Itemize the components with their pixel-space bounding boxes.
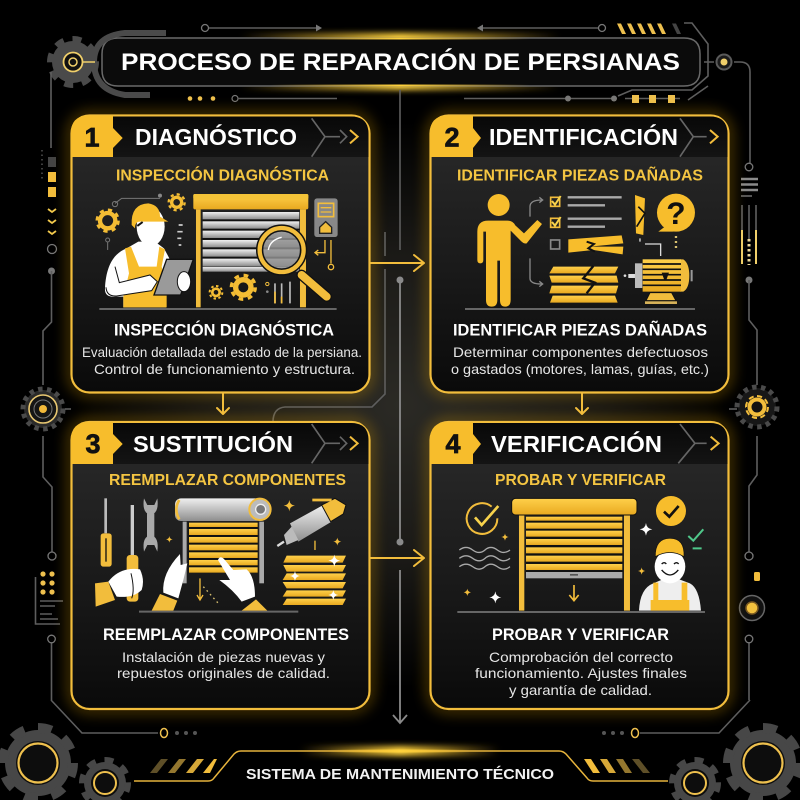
description: repuestos originales de calidad.	[117, 665, 330, 681]
heading: VERIFICACIÓN	[491, 430, 662, 457]
description	[451, 344, 709, 377]
illustration: replacing components	[95, 498, 346, 612]
badge number 3	[71, 422, 123, 464]
arrow: step 2 to step 4	[576, 393, 588, 414]
description: Instalación de piezas nuevas y	[122, 649, 325, 665]
caulking gun	[290, 505, 332, 542]
illustration: testing shutter and happy technician	[457, 496, 705, 612]
waves	[459, 547, 510, 569]
badge number 2: 2	[444, 123, 460, 153]
badge number 2	[430, 116, 481, 157]
description: Comprobación del correcto	[489, 649, 673, 665]
badge number 4: 4	[445, 429, 461, 459]
panel glows	[72, 116, 728, 709]
technician	[639, 578, 701, 611]
heading: SUSTITUCIÓN	[133, 430, 293, 457]
icon: gears bottom left	[3, 728, 128, 800]
illustration: person identifying damaged parts	[465, 194, 695, 309]
heading: IDENTIFICACIÓN	[489, 123, 678, 150]
illustration: person identifying damaged parts: ?	[666, 195, 686, 231]
title banner	[102, 33, 700, 90]
header chevrons	[680, 118, 718, 157]
badge number 4	[430, 422, 481, 464]
worker body	[105, 242, 169, 307]
subtitle: REEMPLAZAR COMPONENTES	[109, 472, 346, 489]
magnifier	[302, 275, 327, 297]
tools	[102, 498, 110, 533]
icon: header gear left	[50, 33, 166, 95]
roller	[183, 522, 187, 583]
description	[82, 344, 362, 377]
description: o gastados (motores, lamas, guías, etc.)	[451, 361, 709, 377]
decorative circuit: left column	[23, 150, 71, 700]
badge number 1	[71, 116, 123, 157]
check circle	[467, 503, 497, 534]
header chevrons	[312, 118, 358, 157]
subtitle: PROBAR Y VERIFICAR	[495, 472, 666, 489]
sparkles	[489, 523, 652, 603]
footer banner	[134, 746, 668, 783]
description: y garantía de calidad.	[509, 682, 652, 698]
footer text: SISTEMA DE MANTENIMIENTO TÉCNICO	[246, 766, 554, 783]
illustration: worker inspecting shutter	[97, 194, 338, 309]
panel 4: verificación	[430, 422, 728, 709]
description: Determinar componentes defectuosos	[453, 344, 708, 360]
description: Control de funcionamiento y estructura.	[94, 361, 355, 377]
description: Evaluación detallada del estado de la persiana.	[82, 344, 362, 360]
icon: gears bottom right	[672, 728, 798, 800]
subtitle: IDENTIFICAR PIEZAS DAÑADAS	[457, 164, 703, 184]
shutter	[196, 209, 201, 307]
decorative circuit: top	[51, 23, 750, 163]
arrow: step 1 to step 3	[217, 393, 229, 414]
panel 3: sustitución	[71, 422, 370, 709]
panel 1: diagnóstico	[71, 116, 370, 392]
section title: REEMPLAZAR COMPONENTES	[103, 626, 349, 644]
subtitle: INSPECCIÓN DIAGNÓSTICA	[116, 166, 329, 184]
description	[117, 649, 330, 681]
badge number 1: 1	[84, 123, 100, 153]
badge number 3: 3	[85, 429, 101, 459]
section title: PROBAR Y VERIFICAR	[492, 626, 669, 644]
remote panel	[314, 198, 338, 237]
title text: PROCESO DE REPARACIÓN DE PERSIANAS	[121, 48, 680, 76]
motor	[680, 259, 689, 292]
arrow: step 1 to step 2	[370, 255, 424, 271]
gears	[97, 194, 255, 299]
description	[475, 649, 687, 698]
decorative circuit: bottom	[51, 700, 750, 738]
decorative circuit: right column	[729, 163, 777, 700]
section title: IDENTIFICAR PIEZAS DAÑADAS	[453, 320, 707, 340]
panel 2: identificación	[430, 116, 728, 392]
center connector lines	[273, 90, 407, 723]
arrow: step 3 to step 4	[370, 550, 424, 566]
header chevrons	[312, 424, 358, 463]
heading: DIAGNÓSTICO	[135, 123, 297, 150]
section title: INSPECCIÓN DIAGNÓSTICA	[114, 320, 334, 340]
description: funcionamiento. Ajustes finales	[475, 665, 687, 681]
hands	[152, 594, 177, 611]
header chevrons	[678, 424, 719, 463]
